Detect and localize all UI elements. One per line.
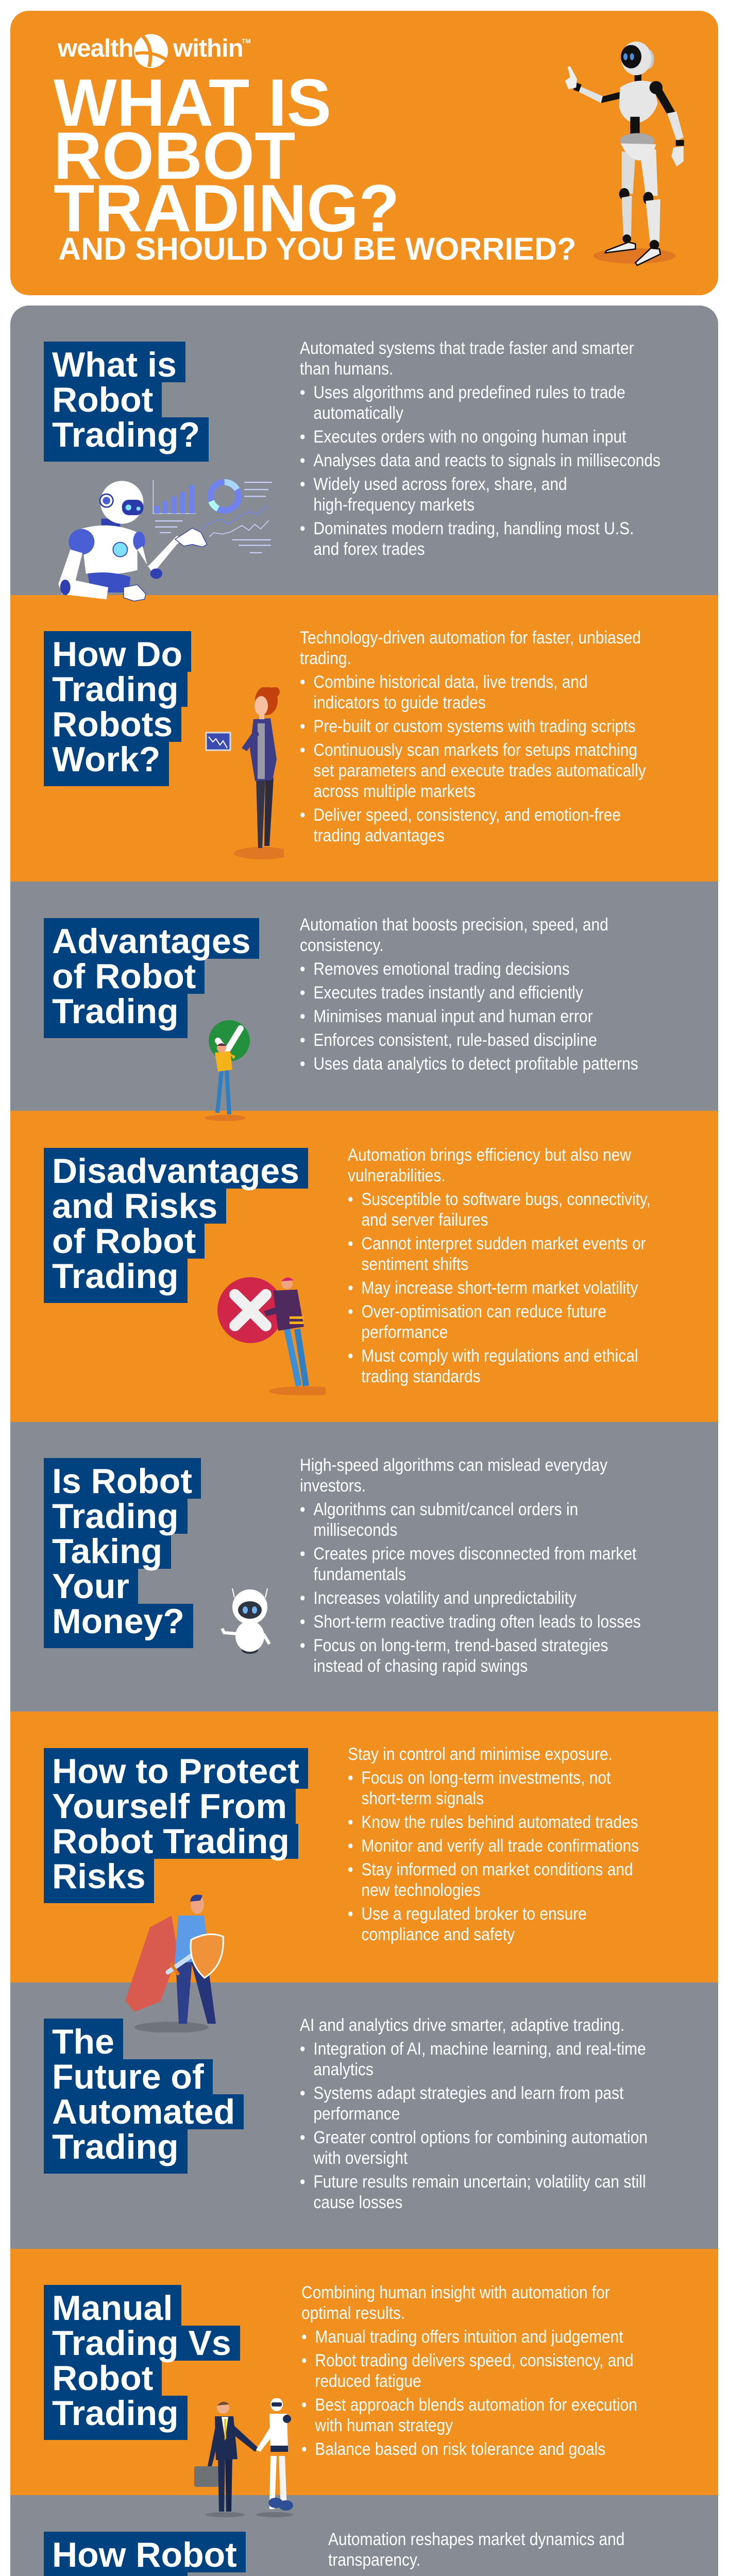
text block: milliseconds [313,1520,397,1540]
text block: new technologies [361,1880,481,1900]
text block: Combine historical data, live trends, and [313,672,588,692]
text block: Widely used across forex, share, and [313,474,567,494]
heading: Taking [52,1532,162,1571]
icon: standing robot pointing [565,41,684,266]
text block [328,2530,624,2576]
heading [44,918,259,1038]
title [54,65,400,246]
text block [348,1744,639,1944]
text block: Robot trading delivers speed, consistency, and [315,2351,634,2370]
title: TRADING? [54,171,400,246]
text block: Automated systems that trade faster and smarter [300,338,634,358]
text block: sentiment shifts [361,1255,468,1274]
text block: Must comply with regulations and ethical [361,1346,638,1366]
text block: Pre-built or custom systems with trading scripts [313,717,636,736]
text block: with oversight [313,2148,408,2168]
text block [300,915,638,1074]
text block: fundamentals [313,1565,406,1584]
logo: wealth within (header): TM [242,38,250,45]
text block: Algorithms can submit/cancel orders in [313,1500,578,1519]
text block: Removes emotional trading decisions [313,959,570,979]
heading: What is [52,345,177,384]
heading: Manual [52,2289,173,2328]
heading: How to Protect [52,1752,299,1791]
text block: Stay in control and minimise exposure. [348,1744,613,1764]
text block: Focus on long-term, trend-based strategies [313,1636,608,1655]
panel: how to protect yourself [10,1711,718,1982]
panel: how robot trading impacts the share market [10,2495,718,2576]
heading: Trading Vs [52,2324,231,2363]
text block: Continuously scan markets for setups matching [313,740,637,760]
panel: advantages [10,882,718,1111]
text block [300,1455,641,1676]
text block: optimal results. [301,2303,405,2323]
heading: Advantages [52,922,250,961]
panel: how do trading robots work [10,595,718,882]
heading: Automated [52,2092,235,2131]
panel: disadvantages [10,1111,718,1422]
text block: Use a regulated broker to ensure [361,1904,587,1924]
text block [300,338,660,559]
text block: indicators to guide trades [313,693,486,713]
text block: Manual trading offers intuition and judgement [315,2327,623,2347]
heading: Trading? [52,415,200,454]
text block: Dominates modern trading, handling most U.S. [313,519,634,538]
text block [300,2015,648,2212]
text block: Greater control options for combining automation [313,2128,648,2147]
icon: robot with charts [58,479,272,602]
heading: Risks [52,1857,145,1896]
heading: Robots [52,705,173,744]
text block: Balance based on risk tolerance and goals [315,2439,605,2459]
text block: High-speed algorithms can mislead everyday [300,1455,607,1475]
heading: Trading [52,2127,179,2166]
text block: cause losses [313,2193,402,2212]
text block: and server failures [361,1210,488,1230]
text block: Integration of AI, machine learning, and real-time [313,2039,646,2059]
heading: Robot Trading [52,1822,290,1861]
icon: hero with shield and sword [125,1895,224,2032]
text block: Increases volatility and unpredictability [313,1588,577,1608]
text block: Systems adapt strategies and learn from past [313,2083,623,2103]
heading [44,1148,308,1303]
heading [44,631,191,786]
title: ROBOT [54,117,295,193]
title: WHAT IS [54,65,331,140]
text block: Deliver speed, consistency, and emotion-free [313,805,621,825]
text block: reduced fatigue [315,2371,421,2391]
text block: performance [313,2104,400,2124]
heading [44,1458,201,1648]
text block: instead of chasing rapid swings [313,1656,528,1676]
heading: Is Robot [52,1462,192,1501]
text block: performance [361,1323,448,1342]
text block: set parameters and execute trades automatically [313,761,646,781]
heading: Trading [52,2394,179,2433]
text block: AI and analytics drive smarter, adaptive trading. [300,2015,624,2035]
heading: and Risks [52,1187,217,1226]
text block: investors. [300,1476,366,1496]
text block: Know the rules behind automated trades [361,1812,638,1832]
text block: Susceptible to software bugs, connectivity, [361,1190,651,1209]
text block: transparency. [328,2550,420,2570]
text block: across multiple markets [313,782,476,801]
text block: Analyses data and reacts to signals in milliseconds [313,451,660,470]
text block: automatically [313,403,403,423]
icon: small robot [221,1588,271,1654]
text block: Combining human insight with automation for [301,2283,610,2302]
text block: Stay informed on market conditions and [361,1860,633,1879]
icon: man with green check [205,1020,250,1121]
text block: Automation that boosts precision, speed, and [300,915,608,935]
text block: Automation brings efficiency but also new [348,1145,631,1165]
text block: vulnerabilities. [348,1166,446,1185]
text block: high-frequency markets [313,495,474,515]
panel: manual vs robot trading [10,2249,718,2495]
text block: Minimises manual input and human error [313,1007,593,1026]
panel: future of automated trading [10,1982,718,2249]
text block: Uses data analytics to detect profitable patterns [313,1054,638,1074]
icon: man with red cross [217,1277,326,1395]
heading [44,2019,244,2174]
heading: of Robot [52,957,196,996]
heading: Trading [52,1257,179,1296]
icon: logo globe [134,34,168,68]
text block: consistency. [300,936,383,955]
heading: Trading [52,1497,179,1536]
header panel [10,11,718,295]
heading: Robot [52,380,153,419]
heading: Money? [52,1602,184,1641]
text block: May increase short-term market volatility [361,1278,638,1298]
text block [300,628,646,845]
heading: How Do [52,635,182,674]
logo: wealth within (header): within [173,35,243,62]
text block: Executes trades instantly and efficiently [313,983,583,1003]
text block: Future results remain uncertain; volatility can still [313,2172,646,2192]
heading: Trading [52,992,179,1031]
heading: Your [52,1567,129,1606]
text block: with human strategy [315,2416,453,2435]
text block: trading standards [361,1367,481,1386]
icon: woman with tablet [205,687,284,859]
text block: than humans. [300,359,393,379]
text block: Technology-driven automation for faster, unbiased [300,628,641,648]
text block: and forex trades [313,539,425,559]
icon: businessman shaking hands with robot [194,2398,293,2517]
text block: Uses algorithms and predefined rules to trade [313,383,625,402]
heading [44,342,209,462]
heading: Trading [52,670,179,709]
text block: Over-optimisation can reduce future [361,1302,606,1321]
panel: is robot trading taking your money [10,1422,718,1711]
text block: Executes orders with no ongoing human input [313,427,626,447]
text block: Short-term reactive trading often leads to losses [313,1612,641,1632]
text block: Cannot interpret sudden market events or [361,1234,646,1253]
heading [44,1748,308,1903]
heading: of Robot [52,1222,196,1261]
text block: Focus on long-term investments, not [361,1768,611,1788]
text block: Automation reshapes market dynamics and [328,2530,624,2549]
text block: Creates price moves disconnected from market [313,1544,636,1564]
text block: trading advantages [313,826,445,845]
heading: Yourself From [52,1787,287,1826]
text block: Monitor and verify all trade confirmations [361,1836,639,1856]
logo: wealth within (header): wealth [58,35,133,62]
panel: what is robot trading [10,306,718,595]
text block: Enforces consistent, rule-based discipline [313,1030,597,1050]
text block: short-term signals [361,1789,484,1808]
heading: The [52,2022,114,2061]
heading: Work? [52,740,160,779]
heading: Disadvantages [52,1151,299,1191]
heading [44,2285,240,2440]
subtitle: AND SHOULD YOU BE WORRIED? [58,231,576,266]
text block [301,2283,637,2459]
heading: How Robot [52,2535,237,2574]
text block: analytics [313,2060,374,2079]
heading: Future of [52,2057,204,2096]
text block: compliance and safety [361,1925,515,1944]
text block: Best approach blends automation for execution [315,2395,637,2415]
heading: Robot [52,2359,153,2398]
text block [348,1145,651,1386]
logo: wealth within (header) [58,34,250,68]
text block: trading. [300,649,351,668]
